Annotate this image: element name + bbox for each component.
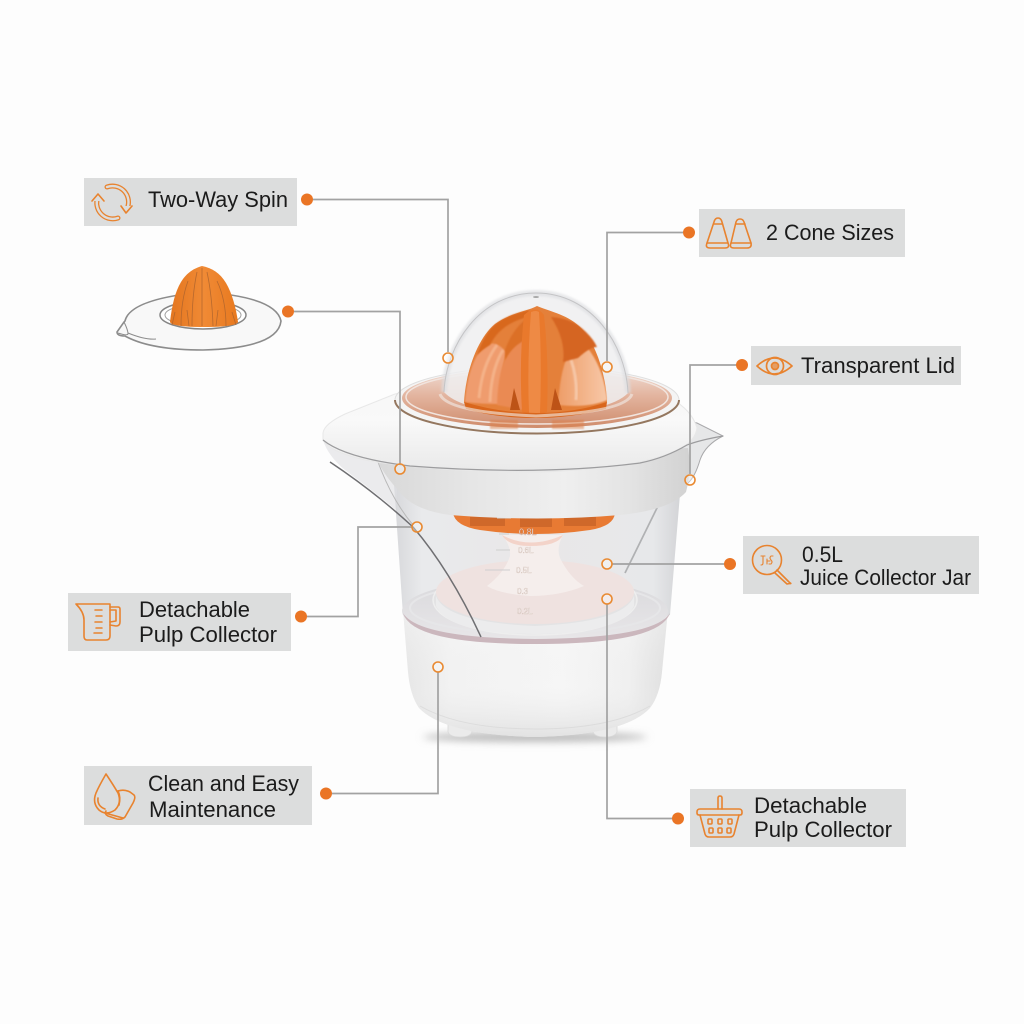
transparent dome lid — [440, 293, 632, 416]
callout: Detachable Pulp Collector (right): Pulp Collector — [754, 817, 892, 842]
reamer cone — [464, 306, 607, 418]
left inner facet — [497, 338, 524, 410]
measuring scale marks: 0.8L — [519, 527, 537, 537]
callout: Detachable Pulp Collector (right) — [602, 594, 906, 847]
right lobe — [558, 345, 607, 406]
callout: 0.5L Juice Collector Jar: Juice Collector Jar — [800, 565, 971, 590]
callout: Detachable Pulp Collector (left): Pulp Collector — [139, 622, 277, 647]
callout: Clean and Easy Maintenance: Maintenance — [149, 797, 276, 822]
callout: 0.5L Juice Collector Jar — [602, 536, 979, 594]
callout: 2 Cone Sizes: 2 Cone Sizes — [766, 220, 894, 245]
lid disc — [395, 366, 679, 434]
callout: reamer detail illustration — [117, 266, 405, 474]
measuring scale marks — [485, 511, 537, 616]
measuring scale marks: 0.3 — [517, 587, 529, 596]
callout: 0.5L Juice Collector Jar: 0.5L — [802, 542, 843, 567]
orange strainer ring — [453, 513, 615, 534]
callout: Clean and Easy Maintenance — [84, 662, 443, 825]
centre post — [487, 535, 584, 596]
drip tray — [402, 578, 670, 644]
measuring scale marks: 0.2L — [517, 607, 533, 616]
lower white skirt — [378, 448, 690, 518]
icon: magnifier — [752, 546, 791, 584]
callout: Detachable Pulp Collector (left) — [68, 522, 422, 651]
mini orange cone — [170, 266, 238, 327]
icon: two cones — [706, 218, 751, 248]
icon: rotating arrows — [92, 186, 132, 219]
juicer product illustration — [323, 293, 723, 742]
transparent juice jar — [323, 440, 687, 644]
callout: Transparent Lid — [685, 346, 961, 485]
motor base — [403, 610, 668, 737]
left lobe — [465, 344, 506, 404]
pulp collector disc — [433, 560, 637, 635]
central rib — [521, 310, 548, 414]
callout: Clean and Easy Maintenance: Clean and Easy — [148, 771, 299, 796]
spout right — [680, 420, 723, 483]
callout: 2 Cone Sizes — [602, 209, 905, 372]
dome back glass — [444, 293, 628, 414]
icon: basket — [697, 796, 742, 837]
white rim with handle — [323, 378, 697, 472]
measuring scale marks: 0.5L — [516, 566, 532, 575]
icon: water drop and sponge — [95, 774, 135, 819]
callout: Two-Way Spin — [84, 178, 453, 363]
mini disc — [117, 292, 281, 350]
jar glass outlines — [323, 440, 398, 510]
measuring scale marks: 0.6L — [518, 546, 534, 555]
icon: eye — [757, 358, 792, 374]
callout: Two-Way Spin: Two-Way Spin — [148, 187, 288, 212]
icon: measuring jug — [76, 604, 120, 640]
callout: Transparent Lid: Transparent Lid — [801, 353, 955, 378]
dark upper shoulders — [477, 310, 530, 355]
callout: Detachable Pulp Collector (left): Detachable — [139, 597, 250, 622]
measuring scale marks: 600 — [519, 511, 533, 520]
callout: Detachable Pulp Collector (right): Detachable — [754, 793, 867, 818]
